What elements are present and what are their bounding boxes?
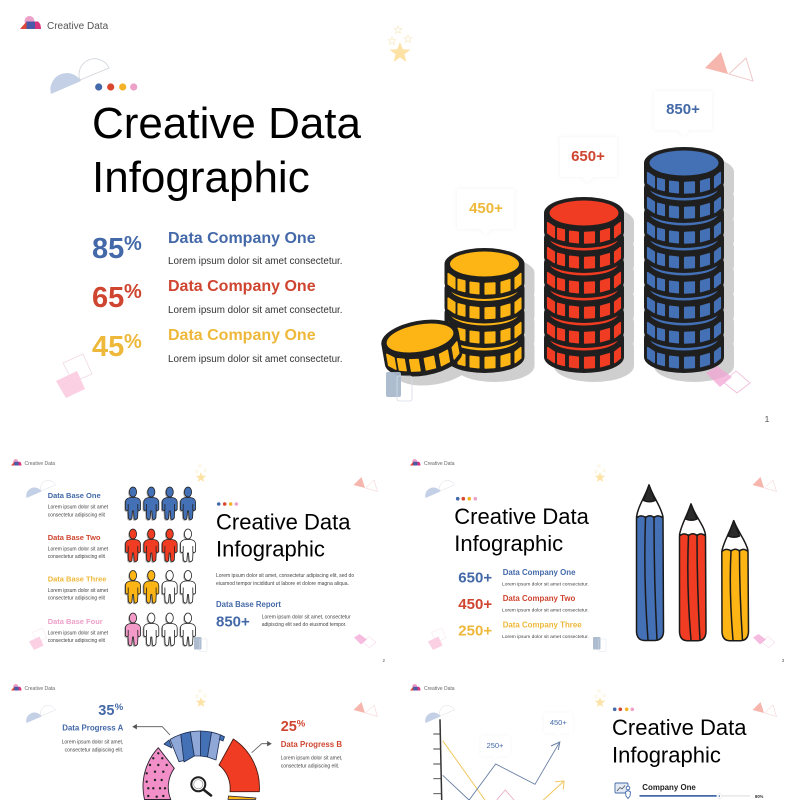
progress B text: % [297, 719, 306, 730]
brand name: Creative Data [24, 686, 55, 692]
progress A text: Data Progress A [62, 724, 124, 733]
data base three text [48, 575, 109, 602]
people row 1 [125, 487, 196, 520]
stat 250+: Lorem ipsum dolor sit amet consectetur. [502, 634, 589, 640]
blue pencil [636, 485, 664, 640]
company one progress: Company One [642, 783, 696, 792]
callout 650+ [560, 137, 617, 183]
callout 450+: 450+ [469, 200, 503, 217]
title: Infographic [612, 742, 721, 767]
title [92, 99, 362, 202]
data base four text: Data Base Four [48, 617, 103, 626]
callout 250+ [481, 736, 510, 759]
logo [11, 459, 22, 466]
icon: magnifier [191, 777, 211, 796]
red pencil [680, 504, 706, 641]
stat 650+: Data Company One [503, 568, 576, 577]
stat: 45%: Lorem ipsum dolor sit amet consectetur. [168, 354, 343, 365]
data base report [216, 600, 351, 631]
data base two text [48, 533, 109, 560]
title: Creative Data [454, 504, 590, 529]
page number: 3 [782, 658, 785, 663]
callout 850+ [654, 91, 712, 136]
title: Creative Data [216, 510, 351, 534]
title: Creative Data [612, 715, 747, 740]
progress B text: 25 [281, 719, 297, 735]
data base report: adipiscing elit sed do eiusmod tempor. [262, 622, 346, 628]
data base one text: Lorem ipsum dolor sit amet [48, 505, 109, 511]
stat: 85%: % [124, 233, 142, 255]
data base three text: Data Base Three [48, 575, 106, 584]
stat: 65% [92, 278, 343, 316]
stat 450+: Lorem ipsum dolor sit amet consectetur. [502, 608, 589, 614]
brand name: Creative Data [24, 461, 55, 467]
data base one text [48, 491, 109, 519]
stat: 45%: Data Company One [168, 327, 316, 344]
colour dots [456, 497, 477, 501]
progress B text: consectetur adipiscing elit. [281, 763, 339, 769]
colour dots [217, 502, 238, 506]
title [454, 504, 590, 556]
line chart [433, 719, 564, 800]
progress A text: 35 [98, 703, 114, 719]
brand name: Creative Data [424, 461, 455, 467]
progress B text [281, 719, 342, 769]
title: Infographic [454, 531, 563, 556]
title [612, 715, 747, 767]
icon: monitor with person [615, 783, 630, 798]
data base four text [48, 617, 109, 644]
stat 250+: Data Company Three [503, 620, 582, 629]
fallen coin [378, 314, 465, 382]
page number: 1 [765, 414, 770, 424]
stat: 65%: % [124, 281, 142, 303]
slide 2: people chart [11, 459, 385, 663]
data base one text: Data Base One [48, 491, 101, 500]
logo [11, 684, 22, 690]
stat: 65%: 65 [92, 282, 124, 314]
page number: 2 [382, 658, 385, 663]
data base two text: Data Base Two [48, 533, 101, 542]
red coin stack [544, 197, 624, 373]
title: Infographic [92, 153, 310, 202]
stat 650+ [458, 568, 589, 587]
stat: 85%: 85 [92, 233, 124, 265]
decorative shapes [26, 464, 377, 652]
data base report: Data Base Report [216, 600, 281, 609]
stat: 65%: Data Company One [168, 278, 316, 295]
blue coin stack [644, 147, 724, 373]
decorative shapes [425, 689, 776, 723]
paragraph: Lorem ipsum dolor sit amet, consectetur adipiscing elit, sed do [216, 573, 354, 579]
stat: 45%: % [124, 331, 142, 353]
donut: yellow segment [228, 796, 256, 800]
people row 2 [125, 529, 196, 562]
donut: red segment [219, 739, 259, 792]
stat 250+ [458, 620, 589, 640]
stat 450+: Data Company Two [503, 594, 576, 603]
stat 650+: Lorem ipsum dolor sit amet consectetur. [502, 581, 589, 587]
people row 3 [125, 570, 196, 604]
people row 4 [125, 613, 196, 646]
coin shadows [388, 156, 734, 391]
decorative shapes [26, 689, 377, 723]
slide 5: line chart [410, 684, 776, 800]
yellow coin stack [444, 248, 524, 373]
progress B text: Lorem ipsum dolor sit amet, [281, 756, 342, 762]
paragraph [216, 573, 354, 587]
stat 650+: 650+ [458, 570, 492, 587]
arrow to progress A [133, 725, 170, 735]
title: Infographic [216, 537, 325, 562]
colour dots [95, 83, 137, 91]
brand name: Creative Data [47, 21, 109, 32]
data base report: 850+ [216, 614, 250, 631]
stat 450+ [458, 594, 589, 614]
stat: 45%: 45 [92, 331, 124, 363]
progress B text: Data Progress B [281, 740, 342, 749]
logo [20, 16, 41, 29]
data base three text: Lorem ipsum dolor sit amet [48, 588, 109, 594]
decorative shapes [50, 26, 753, 401]
stat: 65%: Lorem ipsum dolor sit amet consectetur. [168, 305, 343, 316]
progress A text [62, 702, 124, 753]
slide 3: pencils [410, 459, 785, 663]
arrow to progress B [252, 742, 271, 753]
brand name: Creative Data [424, 686, 455, 692]
title [216, 510, 351, 562]
company one progress: 80% [755, 794, 764, 799]
data base four text: Lorem ipsum dolor sit amet [48, 630, 109, 636]
progress A text: consectetur adipiscing elit. [65, 747, 123, 753]
callout 850+: 850+ [666, 101, 700, 118]
decorative shapes [425, 464, 776, 652]
company one progress [639, 783, 764, 799]
data base two text: Lorem ipsum dolor sit amet [48, 546, 109, 552]
callout 650+: 650+ [571, 148, 605, 165]
callout 450+: 450+ [550, 718, 567, 727]
logo [410, 684, 420, 690]
callout 450+ [457, 189, 514, 235]
callout 450+ [544, 713, 573, 736]
title: Creative Data [92, 99, 362, 148]
paragraph: eiusmod tempor incididunt ut labore et dolore magna aliqua. [216, 581, 349, 587]
slide 4: donut progress [11, 684, 378, 800]
stat 250+: 250+ [458, 622, 492, 639]
data base report: Lorem ipsum dolor sit amet, consectetur [262, 614, 351, 620]
donut: pink segment [143, 748, 174, 800]
data base four text: consectetur adipiscing elit [48, 638, 106, 644]
data base two text: consectetur adipiscing elit [48, 554, 106, 560]
donut: blue striped segment [164, 731, 224, 762]
stat: 85% [92, 230, 343, 267]
progress A text: Lorem ipsum dolor sit amet, [62, 740, 123, 746]
slide 1: coins overview [20, 16, 770, 424]
colour dots [613, 708, 634, 711]
stat: 85%: Data Company One [168, 230, 316, 247]
logo [410, 459, 420, 466]
stat 450+: 450+ [458, 596, 492, 613]
yellow pencil [722, 521, 748, 641]
stat: 45% [92, 327, 343, 365]
data base three text: consectetur adipiscing elit [48, 596, 106, 602]
stat: 85%: Lorem ipsum dolor sit amet consectetur. [168, 256, 343, 267]
data base one text: consectetur adipiscing elit [48, 513, 106, 519]
callout 250+: 250+ [487, 741, 504, 750]
progress A text: % [115, 702, 124, 713]
